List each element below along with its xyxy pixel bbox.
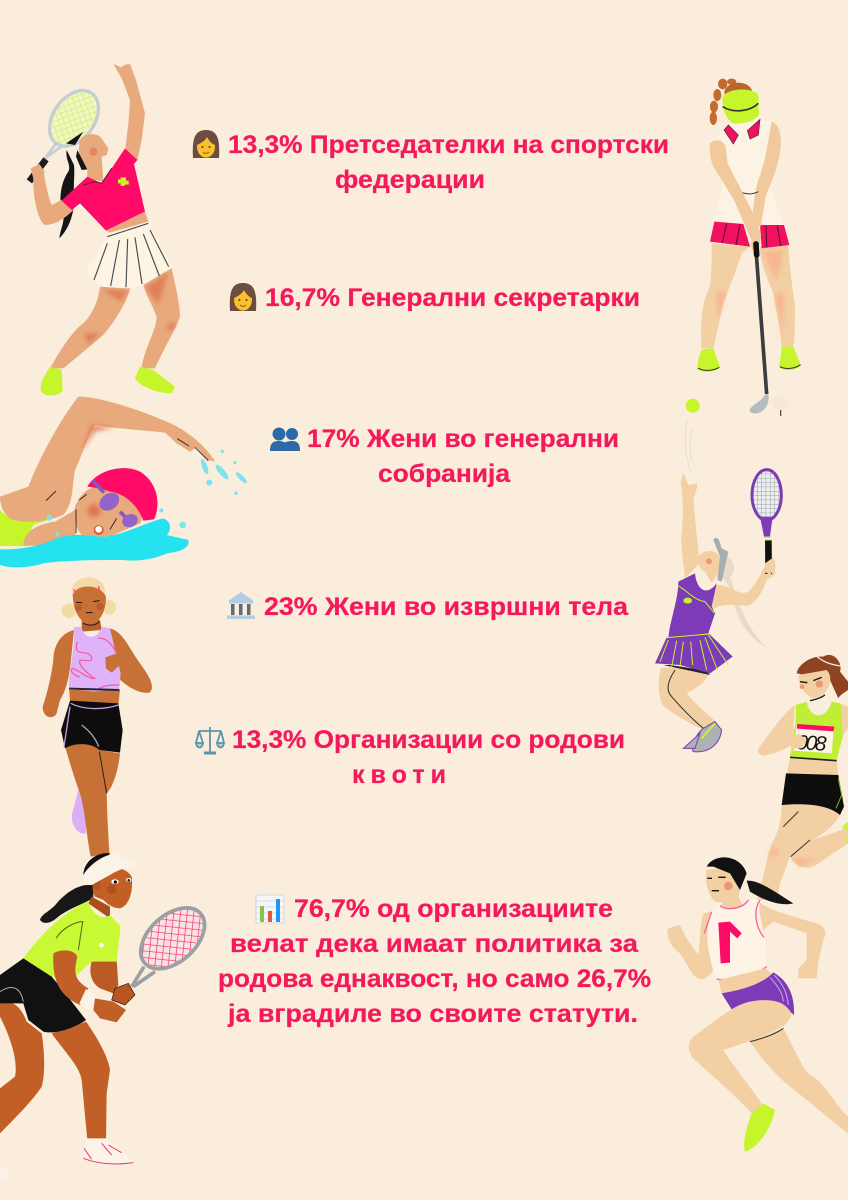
text: ја вградиле во своите статути. [227, 1000, 638, 1028]
text: 23% Жени во извршни тела [264, 593, 629, 621]
text: велат дека имаат политика за [230, 930, 639, 958]
text: 76,7% од организациите [294, 895, 613, 923]
icon: woman [193, 130, 219, 158]
figure: blonde runner [43, 577, 152, 857]
figure: tennis player in pink shirt [29, 64, 180, 396]
text: 17% Жени во генерални [307, 425, 619, 453]
icon: classical building [227, 592, 255, 619]
runner with bib 008 [757, 653, 848, 900]
figure: tennis player serving in purple [655, 399, 781, 752]
text: 16,7% Генерални секретарки [265, 284, 640, 312]
bib number: 008 [796, 731, 828, 756]
icon: bar chart [256, 895, 284, 923]
figure: tennis player in neon shirt [0, 853, 216, 1180]
stat: women in executive bodies [227, 592, 629, 621]
icon: balance scale [196, 727, 224, 753]
text: 13,3% Претседателки на спортски [228, 131, 669, 159]
figure: golfer [697, 79, 801, 416]
icon: woman [230, 283, 256, 311]
figure: swimmer [0, 397, 248, 567]
text: 13,3% Организации со родови [232, 726, 625, 754]
stat: gender equality policies [218, 895, 651, 1028]
stat: women in general assemblies [270, 425, 619, 488]
stat: presidents of federations [193, 130, 669, 194]
runner with arrow shirt [667, 857, 848, 1152]
text: родова еднаквост, но само 26,7% [218, 965, 651, 993]
text: квоти [352, 761, 449, 789]
figure: runner with bib 008 and runner with arrow shirt [667, 653, 848, 1152]
stat: organisations with gender quotas [196, 726, 625, 789]
stat: general secretaries [230, 283, 640, 312]
text: собранија [378, 460, 511, 488]
text: федерации [335, 166, 485, 194]
icon: two people silhouettes [270, 428, 300, 451]
